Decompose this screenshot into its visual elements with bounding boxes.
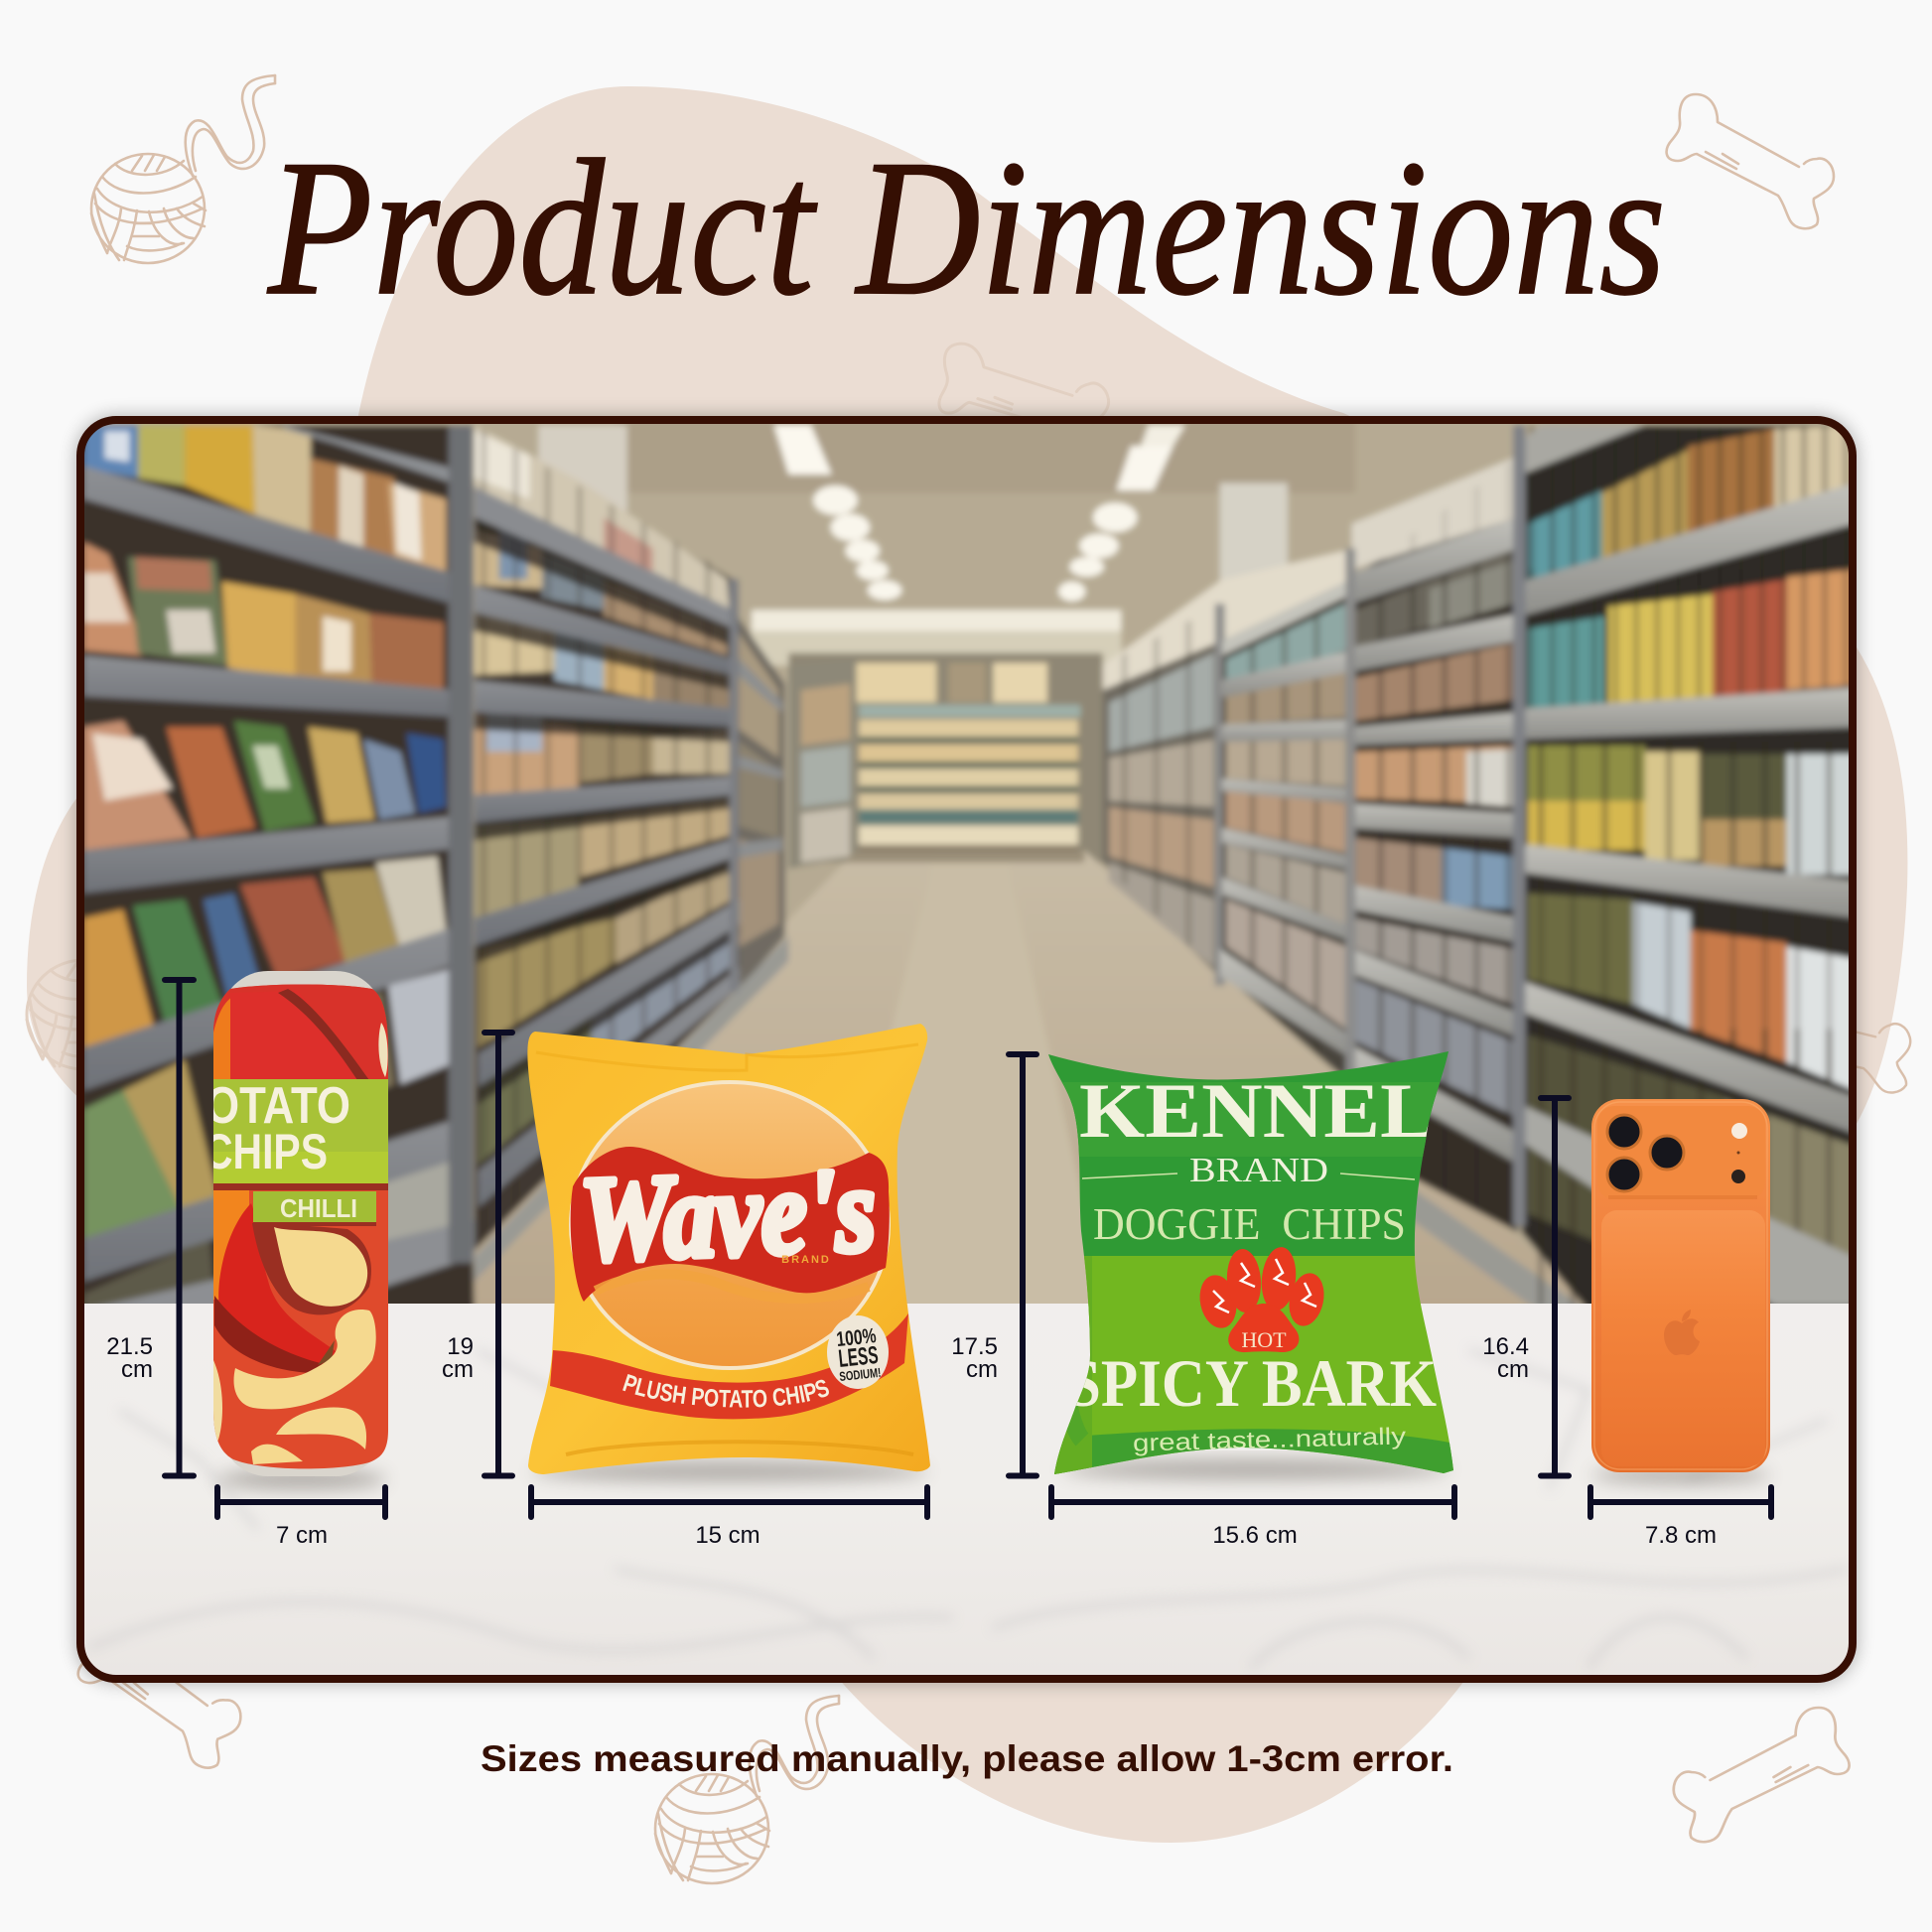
right bay 1 — [1522, 425, 1861, 1312]
measure: Kennel height: cm — [966, 1356, 998, 1383]
measure: Wave's height: cm — [442, 1356, 474, 1383]
magnetic panel — [1601, 1210, 1765, 1466]
measure: can width: 7 cm — [276, 1522, 328, 1549]
measure: Kennel height — [951, 1054, 1036, 1475]
right bay 2 — [1351, 456, 1518, 1232]
marble counter — [80, 1304, 1853, 1679]
chilli tag — [253, 1191, 376, 1223]
measure: Kennel width: 15.6 cm — [1212, 1522, 1298, 1549]
product: Wave's chips bag: BRAND — [781, 1254, 831, 1266]
right bay 3 — [1222, 579, 1351, 1084]
badge: SODIUM! — [839, 1365, 882, 1384]
measure: phone height: cm — [1497, 1356, 1529, 1383]
card border — [80, 420, 1853, 1679]
measure: can height — [106, 980, 194, 1475]
panel: product scene card — [73, 419, 1861, 1679]
icon: flaming paw — [1195, 1245, 1328, 1352]
measure: phone width: 7.8 cm — [1645, 1522, 1717, 1549]
icon: bone bottom left — [68, 1615, 252, 1771]
measure: Wave's width: 15 cm — [695, 1522, 760, 1549]
measure: Wave's height — [442, 1033, 512, 1475]
lower red strip — [550, 1313, 908, 1419]
badge: 100% — [835, 1324, 878, 1351]
card shadow — [76, 416, 1857, 1683]
product: potato chips can — [204, 971, 388, 1476]
product: orange phone — [1591, 1099, 1770, 1472]
potato chip — [571, 1082, 889, 1368]
product: potato chips can: CHILLI — [280, 1193, 357, 1223]
product: Kennel Brand doggie chips bag: great taste...naturally — [1133, 1423, 1406, 1457]
product shadows — [217, 1459, 1770, 1489]
measure: Wave's width — [531, 1487, 927, 1549]
badge: LESS — [837, 1341, 880, 1373]
icon: yarn ball top left — [91, 75, 275, 263]
measure: phone width — [1590, 1487, 1771, 1549]
badge — [827, 1315, 889, 1389]
measure: can height: cm — [121, 1356, 153, 1383]
product: Kennel Brand doggie chips bag: DOGGIE CHIPS — [1093, 1199, 1406, 1249]
product: Wave's chips bag: PLUSH POTATO CHIPS — [622, 1374, 829, 1408]
icon: yarn ball bottom centre — [655, 1696, 839, 1883]
icon: bone bottom right — [1674, 1708, 1850, 1842]
title: Product Dimensions — [266, 120, 1666, 336]
icon: bone top right — [1667, 94, 1834, 228]
measure: Kennel width — [1051, 1487, 1454, 1549]
red banner — [571, 1147, 890, 1302]
footer note: Sizes measured manually, please allow 1-3cm error. — [481, 1738, 1453, 1779]
left bay 2 — [470, 519, 735, 1252]
icon: flaming paw: HOT — [1241, 1327, 1287, 1352]
far left bay 3 — [733, 610, 785, 992]
icon: faded yarn on left edge — [27, 882, 210, 1069]
right bay 4 — [1099, 642, 1219, 973]
measure: phone height: 16.4 — [1482, 1333, 1529, 1360]
measure: can width — [217, 1487, 385, 1549]
can label text — [213, 1086, 349, 1170]
product: Wave's chips bag — [527, 1024, 930, 1474]
icon: apple logo — [1664, 1310, 1700, 1355]
lenses — [1607, 1115, 1684, 1191]
photo: blurred supermarket aisle — [73, 419, 1861, 1318]
icon: faded bone behind card — [928, 318, 1118, 482]
camera plateau — [1597, 1106, 1765, 1199]
measure: can height: 21.5 — [106, 1333, 153, 1360]
Kennel title: KENNEL — [1079, 1067, 1437, 1154]
can label text: CHIPS — [204, 1124, 328, 1179]
can label text: OTATO — [206, 1077, 350, 1135]
product: Kennel Brand doggie chips bag — [1042, 1042, 1459, 1479]
product: Kennel Brand doggie chips bag: BRAND — [1189, 1151, 1328, 1189]
Wave's logo: Wave's — [578, 1143, 878, 1287]
Spicy Bark text: SPICY BARK — [1067, 1345, 1437, 1421]
left bay 1 — [73, 425, 475, 1312]
measure: phone height — [1482, 1098, 1569, 1475]
measure: Kennel height: 17.5 — [951, 1333, 998, 1360]
icon: bone at right edge — [1736, 962, 1923, 1126]
marble veins — [157, 1358, 1809, 1638]
measure: Wave's height: 19 — [447, 1333, 474, 1360]
